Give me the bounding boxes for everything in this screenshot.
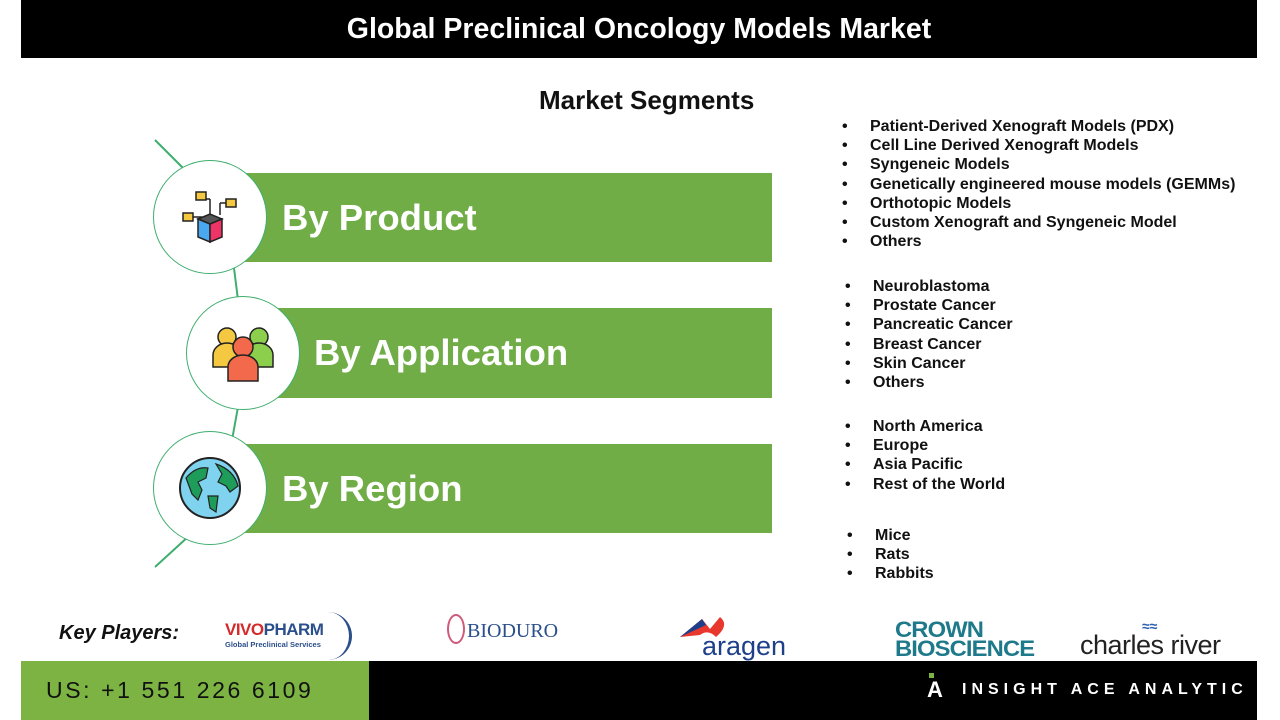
list: region <box>846 418 1005 493</box>
footer: brand: INSIGHT ACE ANALYTIC <box>962 681 1248 698</box>
list: animal: Rabbits <box>875 565 934 582</box>
list: application <box>846 278 1013 391</box>
list: region: Rest of the World <box>873 476 1005 493</box>
list: application: Others <box>873 374 925 391</box>
bar: by application: By Application <box>314 332 568 373</box>
list: application: Prostate Cancer <box>873 297 996 314</box>
list: animal <box>848 527 934 582</box>
list: region: Asia Pacific <box>873 456 963 473</box>
logo: bioduro <box>447 614 558 644</box>
footer: phone: US: +1 551 226 6109 <box>46 677 313 703</box>
icon: globe <box>153 431 267 545</box>
list: application: Breast Cancer <box>873 336 982 353</box>
list: animal: Mice <box>875 527 911 544</box>
bar: by product: By Product <box>282 196 477 238</box>
bar: by application <box>243 308 772 398</box>
footer: phone <box>21 661 369 720</box>
title bar <box>21 0 1257 58</box>
list: product: Patient-Derived Xenograft Models (PDX) <box>870 118 1174 135</box>
list: application: Neuroblastoma <box>873 278 989 295</box>
list: product: Cell Line Derived Xenograft Models <box>870 137 1138 154</box>
logo: aragen <box>680 617 786 661</box>
list: product: Custom Xenograft and Syngeneic Model <box>870 214 1177 231</box>
list: application: Skin Cancer <box>873 355 965 372</box>
list: animal: Rats <box>875 546 910 563</box>
bar: by region: By Region <box>282 468 462 508</box>
connector line <box>154 139 238 568</box>
list: product: Orthotopic Models <box>870 195 1011 212</box>
list: region: North America <box>873 418 983 435</box>
logo: charles river: charles river <box>1080 630 1221 660</box>
list: region: Europe <box>873 437 928 454</box>
title bar: Global Preclinical Oncology Models Market <box>347 12 931 44</box>
icon: people <box>186 296 300 410</box>
logo: charles river: ≈≈ <box>1142 618 1157 634</box>
heading: market segments: Market Segments <box>539 85 754 115</box>
logo: vivopharm: Global Preclinical Services <box>225 640 321 649</box>
footer: brand <box>369 661 1257 720</box>
list: application: Pancreatic Cancer <box>873 316 1013 333</box>
logo: crown bioscience: BIOSCIENCE <box>895 636 1034 661</box>
logo: crown bioscience <box>895 617 1034 661</box>
icon: product cube <box>153 160 267 274</box>
key players label: Key Players: <box>59 622 179 644</box>
logo: aragen: aragen <box>702 631 786 661</box>
logo: vivopharm: VIVOPHARM <box>225 620 323 639</box>
logo: bioduro: BIODURO <box>467 620 558 642</box>
list: product: Syngeneic Models <box>870 156 1010 173</box>
list: product: Others <box>870 233 922 250</box>
footer: brand: A <box>927 677 943 702</box>
bar: by product <box>210 173 772 262</box>
logo: crown bioscience: CROWN <box>895 617 983 642</box>
list: product: Genetically engineered mouse models (GEMMs) <box>870 176 1235 193</box>
bar: by region <box>210 444 772 533</box>
logo: vivopharm <box>225 612 352 660</box>
list: product <box>842 118 1235 250</box>
